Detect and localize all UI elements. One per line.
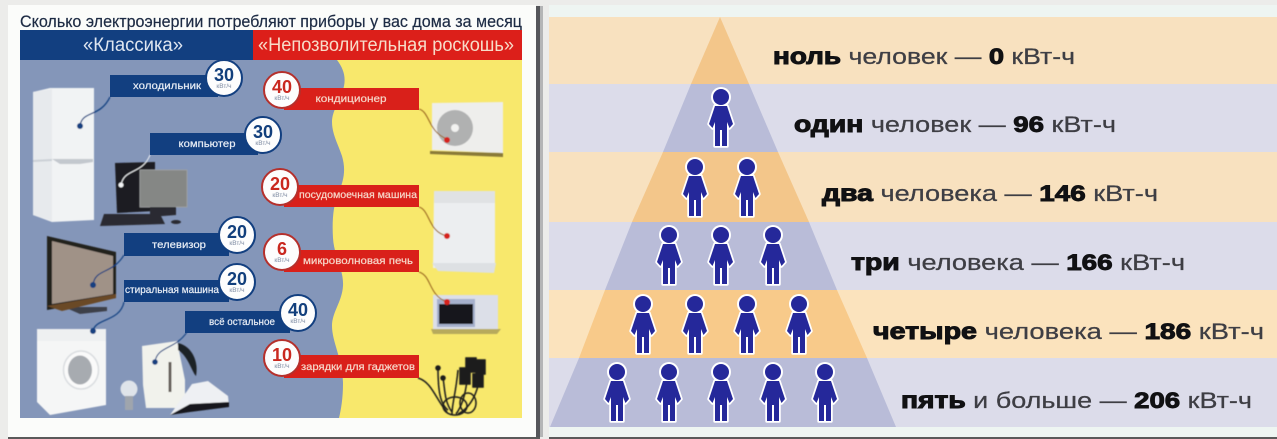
- icon: TV: [47, 236, 124, 314]
- label: стиральная машина 20: [124, 264, 255, 302]
- heading: Классика: [20, 30, 253, 60]
- heading: Непозволительная роскошь: «Непозволительная роскошь»: [258, 35, 514, 56]
- title: Сколько электроэнергии потребляют приборы у вас дома за месяц: [20, 12, 522, 31]
- text: zero people: ноль человек — 0 кВт-ч: [773, 43, 1075, 69]
- label: микроволновая печь 6: микроволновая печь: [303, 256, 413, 267]
- label: холодильник 30: холодильник: [133, 81, 202, 92]
- text: two people: два человека — 146 кВт-ч: [822, 180, 1158, 206]
- label: телевизор 20: 20: [227, 222, 247, 242]
- icon: computer: [100, 155, 187, 226]
- people: two: [683, 157, 759, 216]
- pyramid: [550, 17, 896, 427]
- label: компьютер 30: 30: [253, 122, 273, 142]
- people: one: [709, 87, 733, 146]
- icon: kettle, bulb and iron: [120, 332, 229, 415]
- panel: household size pyramid: [549, 5, 1277, 439]
- label: холодильник 30: 30: [214, 65, 234, 85]
- label: кондиционер 40: [264, 72, 419, 110]
- icon: chargers: [418, 358, 485, 415]
- label: всё остальное 40: кВт/ч: [290, 318, 306, 325]
- label: зарядки для гаджетов 10: [264, 340, 419, 378]
- icon: air conditioner: [419, 102, 503, 157]
- heading: Классика: «Классика»: [83, 35, 183, 56]
- text: one person: один человек — 96 кВт-ч: [794, 111, 1116, 137]
- icon: microwave: [419, 272, 501, 334]
- text: three people: три человека — 166 кВт-ч: [851, 249, 1185, 275]
- label: кондиционер 40: кондиционер: [316, 94, 387, 105]
- label: микроволновая печь 6: [264, 234, 419, 272]
- label: зарядки для гаджетов 10: кВт/ч: [274, 363, 290, 370]
- label: компьютер 30: компьютер: [178, 139, 236, 150]
- label: компьютер 30: [150, 117, 281, 155]
- label: стиральная машина 20: кВт/ч: [229, 287, 245, 294]
- label: телевизор 20: телевизор: [152, 240, 206, 251]
- text: five or more people: пять и больше — 206 кВт-ч: [901, 387, 1252, 413]
- label: зарядки для гаджетов 10: 10: [272, 345, 292, 365]
- label: холодильник 30: кВт/ч: [216, 83, 232, 90]
- label: микроволновая печь 6: 6: [277, 239, 287, 259]
- label: стиральная машина 20: стиральная машина: [125, 285, 219, 296]
- text: four people: четыре человека — 186 кВт-ч: [873, 318, 1264, 344]
- label: посудомоечная машина 20: кВт/ч: [272, 192, 288, 199]
- label: посудомоечная машина 20: посудомоечная машина: [299, 190, 417, 201]
- label: всё остальное 40: 40: [288, 300, 308, 320]
- label: микроволновая печь 6: кВт/ч: [274, 257, 290, 264]
- heading: Непозволительная роскошь: [253, 30, 522, 60]
- label: посудомоечная машина 20: 20: [270, 174, 290, 194]
- label: компьютер 30: кВт/ч: [255, 140, 271, 147]
- icon: washing machine: [37, 302, 124, 415]
- label: телевизор 20: [124, 217, 255, 256]
- label: стиральная машина 20: 20: [227, 269, 247, 289]
- icon: dishwasher: [419, 191, 496, 273]
- panel: appliance consumption card: [8, 5, 543, 439]
- label: всё остальное 40: [185, 295, 316, 333]
- label: зарядки для гаджетов 10: зарядки для гаджетов: [301, 362, 415, 373]
- label: посудомоечная машина 20: [262, 169, 419, 207]
- label: кондиционер 40: 40: [272, 77, 292, 97]
- people: five: [605, 362, 837, 421]
- label: кондиционер 40: кВт/ч: [274, 95, 290, 102]
- label: телевизор 20: кВт/ч: [229, 240, 245, 247]
- label: холодильник 30: [110, 60, 242, 97]
- label: всё остальное 40: всё остальное: [209, 317, 275, 328]
- icon: fridge: [33, 88, 110, 222]
- people: three: [657, 225, 785, 284]
- people: four: [631, 294, 811, 353]
